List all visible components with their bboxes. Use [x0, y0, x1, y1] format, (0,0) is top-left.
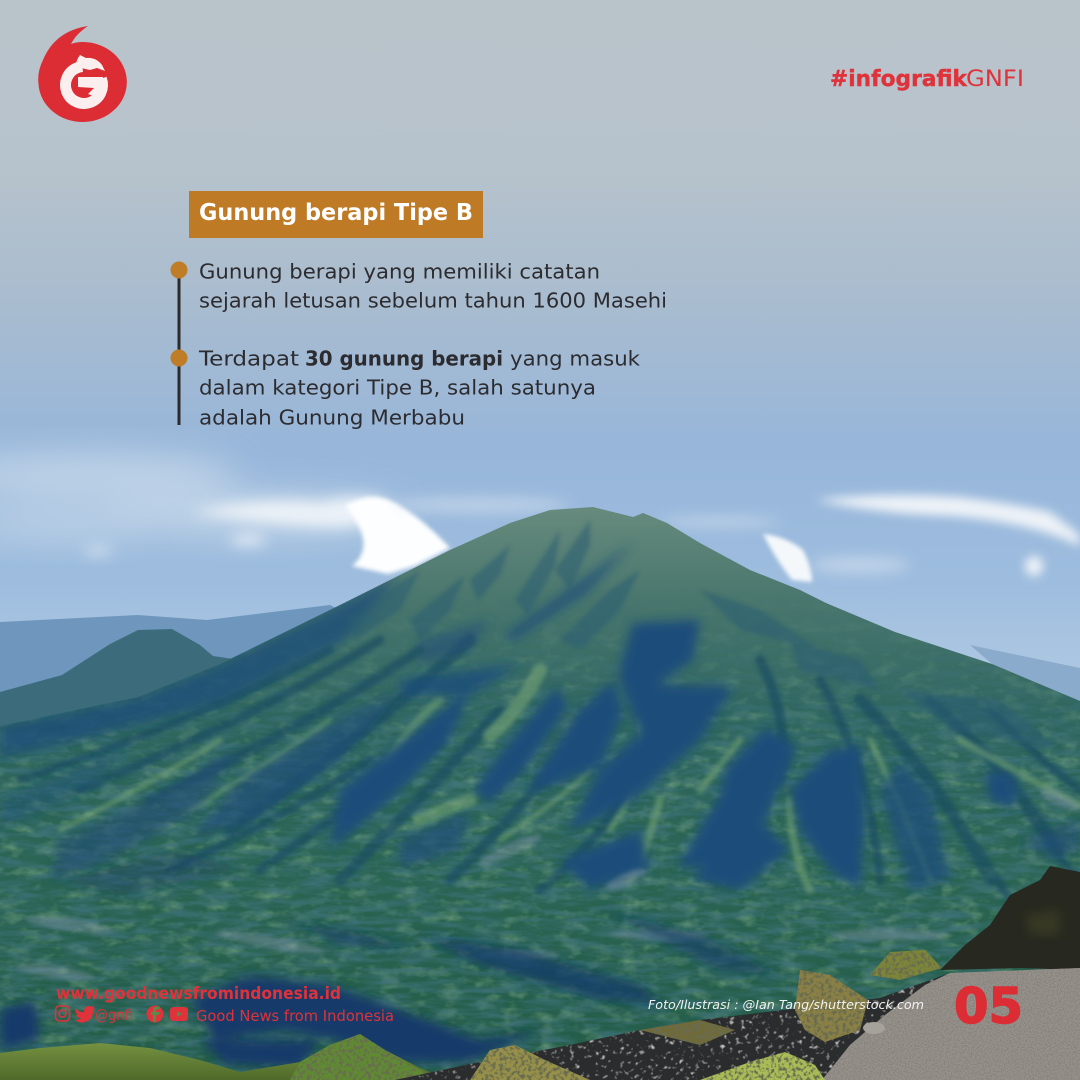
timeline with bullets — [170, 262, 188, 425]
village patches — [15, 785, 1080, 984]
text block: second point: adalah Gunung Merbabu — [199, 406, 465, 430]
radial ravine streaks — [20, 640, 1080, 900]
photo credit: Foto/Ilustrasi : @Ian Tang/shutterstock.com — [648, 998, 924, 1012]
text block: first point: Gunung berapi yang memiliki catatan — [199, 260, 600, 284]
rocky slope — [390, 970, 960, 1080]
text block: second point: dalam kategori Tipe B, salah satunya — [199, 376, 596, 400]
dark cliff rock — [940, 866, 1080, 970]
terrain texture — [0, 639, 1080, 1072]
main mountain — [0, 500, 1080, 1080]
text block: second point: yang masuk — [510, 346, 640, 370]
page number: 05 — [954, 978, 1023, 1035]
page name: Good News from Indonesia — [196, 1007, 394, 1025]
text block: second point: 30 gunung berapi — [305, 346, 503, 370]
foreground shrubs and grass — [470, 950, 942, 1080]
gravel path — [820, 960, 1080, 1080]
website url: www.goodnewsfromindonesia.id — [56, 984, 341, 1004]
icon: instagram — [56, 1006, 70, 1021]
icon: youtube — [170, 1007, 188, 1021]
text block: second point — [198, 346, 640, 430]
foreground green hill — [0, 1034, 450, 1080]
icon: twitter — [75, 1006, 95, 1023]
sunlit ridges — [60, 670, 1080, 890]
social row — [56, 1006, 394, 1025]
text block: first point: sejarah letusan sebelum tahun 1600 Masehi — [199, 288, 667, 312]
hashtag: #infografik — [830, 67, 968, 92]
shaded ravines — [0, 543, 1080, 890]
title bar: Gunung berapi Tipe B — [199, 200, 473, 226]
distant small volcano — [0, 629, 240, 730]
hashtag: GNFI — [966, 67, 1024, 92]
text block: first point — [199, 260, 667, 312]
title bar — [189, 191, 483, 238]
upper slope creases — [345, 520, 1060, 750]
logo: red drop shape — [38, 26, 127, 122]
handle: @gnfi — [95, 1006, 133, 1024]
distant hills — [0, 605, 1080, 730]
logo: white eagle G — [60, 55, 108, 109]
text block: second point: Terdapat — [198, 346, 299, 370]
icon: facebook — [146, 1006, 164, 1022]
sky background — [0, 0, 1080, 720]
logo — [38, 26, 127, 122]
valley shadows and dark areas — [0, 850, 780, 1068]
clouds — [0, 453, 1080, 582]
